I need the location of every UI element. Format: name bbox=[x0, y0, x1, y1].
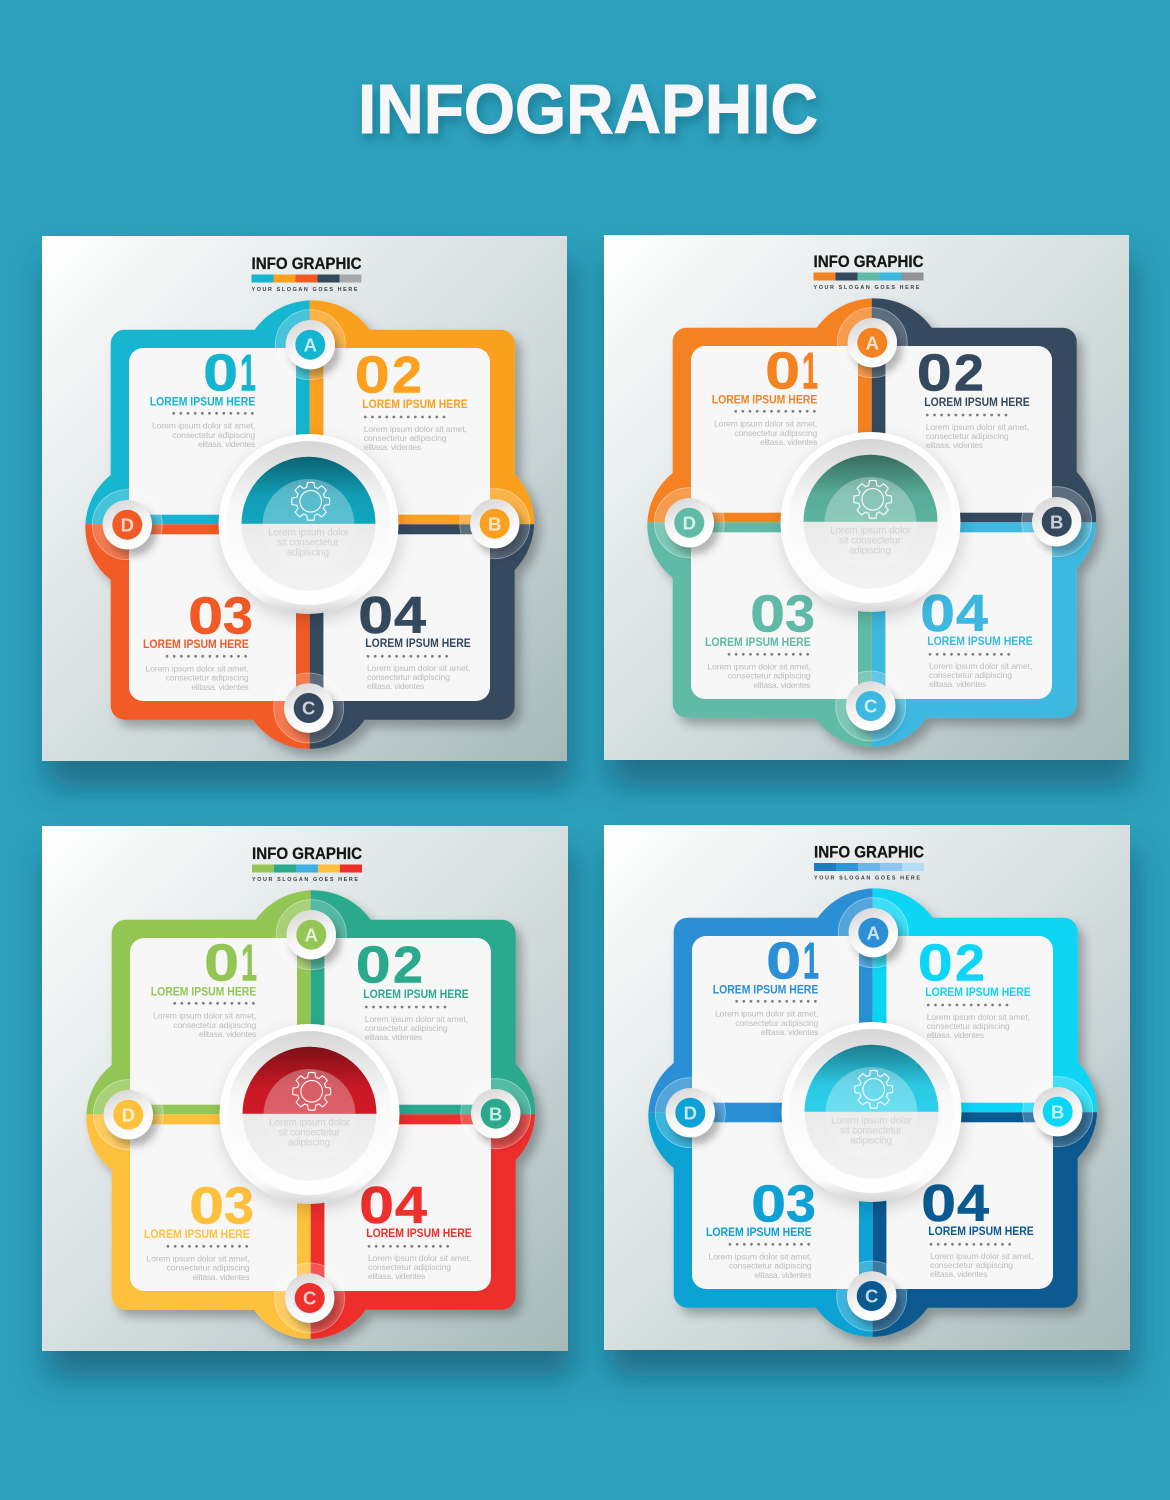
section 02 bbox=[918, 935, 1031, 1040]
section 02: Lorem ipsum dolor sit amet, bbox=[926, 422, 1029, 432]
section 03: Lorem ipsum dolor sit amet, bbox=[146, 1253, 250, 1263]
section 01: elitasa. videntes bbox=[198, 439, 255, 449]
quadrant frame bbox=[85, 300, 534, 749]
section 03: 0 bbox=[751, 1176, 786, 1234]
node D: D bbox=[122, 1104, 135, 1125]
node C bbox=[836, 671, 906, 741]
section 01: consectetur adipiscing bbox=[172, 430, 256, 440]
panel: teal, amber, orange, navy infographic bbox=[42, 236, 567, 761]
node B: B bbox=[488, 513, 501, 534]
section 02: LOREM IPSUM HERE bbox=[924, 396, 1030, 409]
center dial: Lorem ipsum dolor bbox=[268, 527, 350, 538]
section 02: 0 bbox=[917, 345, 952, 403]
header logo bbox=[814, 252, 924, 291]
quadrant frame bbox=[86, 890, 535, 1339]
section 04: consectetur adipiscing bbox=[929, 670, 1012, 680]
section 01 bbox=[713, 932, 819, 1037]
section 02 bbox=[355, 347, 468, 452]
center dial: Lorem ipsum dolor bbox=[831, 1115, 913, 1126]
section 04 bbox=[921, 1175, 1034, 1279]
section 02: Lorem ipsum dolor sit amet, bbox=[364, 424, 467, 434]
section 01: Lorem ipsum dolor sit amet, bbox=[714, 419, 817, 429]
panel: orange, navy, mint, sky infographic bbox=[604, 235, 1129, 760]
header logo: YOUR SLOGAN GOES HERE bbox=[814, 285, 920, 291]
section 03: 3 bbox=[786, 1176, 816, 1234]
section 04: Lorem ipsum dolor sit amet, bbox=[929, 661, 1032, 671]
section 04: elitasa. videntes bbox=[929, 679, 986, 689]
header logo: YOUR SLOGAN GOES HERE bbox=[252, 877, 358, 883]
center dial: Lorem ipsum dolor bbox=[830, 525, 912, 536]
section 01: 0 bbox=[204, 934, 239, 992]
section 03: consectetur adipiscing bbox=[166, 673, 249, 683]
section 04: 0 bbox=[359, 1177, 394, 1235]
node B: B bbox=[1051, 1101, 1064, 1122]
header logo: INFO GRAPHIC bbox=[252, 844, 362, 863]
node C: C bbox=[303, 1288, 316, 1309]
panel: green, teal, yellow, red infographic bbox=[42, 826, 568, 1351]
section 01: 0 bbox=[766, 932, 801, 990]
header logo: YOUR SLOGAN GOES HERE bbox=[252, 287, 358, 293]
node C: C bbox=[302, 698, 315, 719]
section 02 bbox=[917, 345, 1030, 450]
section 01: Lorem ipsum dolor sit amet, bbox=[153, 1011, 256, 1021]
center dial: adipiscing bbox=[287, 547, 329, 558]
section 04 bbox=[358, 587, 471, 691]
section 04: elitasa. videntes bbox=[930, 1269, 987, 1279]
node D bbox=[93, 1080, 163, 1150]
section 01: elitasa. videntes bbox=[761, 1027, 818, 1037]
section 01: 0 bbox=[765, 342, 800, 400]
center dial: sit consectetur bbox=[840, 1125, 903, 1136]
section 02: LOREM IPSUM HERE bbox=[363, 988, 469, 1001]
header logo bbox=[814, 842, 924, 882]
connector bars bbox=[125, 340, 495, 705]
section 01 bbox=[150, 344, 256, 449]
section 03: Lorem ipsum dolor sit amet, bbox=[145, 663, 249, 673]
section 04: Lorem ipsum dolor sit amet, bbox=[930, 1251, 1033, 1261]
section 02: elitasa. videntes bbox=[927, 1030, 984, 1040]
icon: gear bbox=[854, 480, 892, 518]
section 02: consectetur adipiscing bbox=[926, 431, 1009, 441]
section 03: LOREM IPSUM HERE bbox=[705, 636, 811, 649]
white card bbox=[692, 936, 1053, 1289]
section 03: LOREM IPSUM HERE bbox=[144, 1228, 250, 1241]
center dial bbox=[218, 434, 398, 614]
section 04 bbox=[920, 585, 1033, 689]
quadrant frame bbox=[647, 298, 1096, 747]
panel: blue tones infographic bbox=[604, 825, 1130, 1350]
node A bbox=[837, 308, 907, 378]
section 03 bbox=[706, 1176, 816, 1280]
node B: B bbox=[1050, 511, 1063, 532]
center dial: sit consectetur bbox=[277, 537, 340, 548]
section 03: LOREM IPSUM HERE bbox=[706, 1226, 812, 1239]
section 04: elitasa. videntes bbox=[368, 1271, 425, 1281]
node D: D bbox=[683, 512, 696, 533]
section 01: consectetur adipiscing bbox=[735, 1018, 819, 1028]
connector bars bbox=[687, 338, 1057, 703]
section 03: elitasa. videntes bbox=[754, 1270, 812, 1280]
icon: gear bbox=[855, 1070, 893, 1108]
section 02: Lorem ipsum dolor sit amet, bbox=[365, 1014, 468, 1024]
center dial bbox=[220, 1024, 400, 1204]
section 03: 3 bbox=[224, 1178, 254, 1236]
section 04: 4 bbox=[957, 1175, 989, 1233]
header logo: INFO GRAPHIC bbox=[814, 842, 924, 862]
center dial: sit consectetur bbox=[839, 535, 902, 546]
white card bbox=[691, 346, 1052, 699]
node B bbox=[461, 1079, 531, 1149]
section 02: consectetur adipiscing bbox=[927, 1021, 1010, 1031]
node A bbox=[276, 900, 346, 970]
section 01: 1 bbox=[803, 932, 819, 990]
section 02: 2 bbox=[954, 345, 984, 403]
section 03: Lorem ipsum dolor sit amet, bbox=[707, 661, 811, 671]
node D: D bbox=[121, 514, 134, 535]
section 03: consectetur adipiscing bbox=[167, 1263, 250, 1273]
node D bbox=[655, 1078, 725, 1148]
section 03: elitasa. videntes bbox=[192, 1272, 250, 1282]
section 01: elitasa. videntes bbox=[760, 437, 817, 447]
section 04: consectetur adipiscing bbox=[930, 1260, 1013, 1270]
header logo: INFO GRAPHIC bbox=[252, 254, 362, 273]
node C: C bbox=[865, 1286, 878, 1307]
section 02: consectetur adipiscing bbox=[365, 1023, 448, 1033]
section 02: elitasa. videntes bbox=[365, 1032, 422, 1042]
center dial: adipiscing bbox=[288, 1137, 330, 1148]
panel background bbox=[604, 235, 1129, 760]
section 02: LOREM IPSUM HERE bbox=[362, 398, 468, 411]
connector bars bbox=[126, 930, 496, 1295]
node C bbox=[275, 1263, 345, 1333]
section 03: elitasa. videntes bbox=[191, 682, 249, 692]
quadrant frame bbox=[648, 888, 1097, 1337]
section 01: 0 bbox=[203, 344, 238, 402]
section 04: Lorem ipsum dolor sit amet, bbox=[367, 663, 470, 673]
section 04: 4 bbox=[395, 1177, 427, 1235]
section 03: consectetur adipiscing bbox=[728, 671, 811, 681]
section 03: 3 bbox=[785, 586, 815, 644]
section 04: consectetur adipiscing bbox=[367, 672, 450, 682]
node A bbox=[275, 310, 345, 380]
section 02: 0 bbox=[356, 937, 391, 995]
section 02: 2 bbox=[955, 935, 985, 993]
center dial: Lorem ipsum dolor bbox=[269, 1117, 351, 1128]
section 04: 0 bbox=[358, 587, 393, 645]
section 04: elitasa. videntes bbox=[367, 681, 424, 691]
section 02: LOREM IPSUM HERE bbox=[925, 986, 1031, 999]
section 01: elitasa. videntes bbox=[199, 1029, 256, 1039]
section 04: LOREM IPSUM HERE bbox=[366, 1227, 472, 1240]
node B bbox=[460, 489, 530, 559]
section 04: 0 bbox=[920, 585, 955, 643]
section 04: 4 bbox=[394, 587, 426, 645]
section 01: Lorem ipsum dolor sit amet, bbox=[152, 421, 255, 431]
section 01: LOREM IPSUM HERE bbox=[713, 983, 819, 996]
white card bbox=[130, 938, 491, 1291]
section 04: 0 bbox=[921, 1175, 956, 1233]
section 03: 0 bbox=[188, 588, 223, 646]
section 04: 4 bbox=[956, 585, 988, 643]
node D bbox=[654, 488, 724, 558]
node D bbox=[92, 490, 162, 560]
section 02: 2 bbox=[393, 937, 423, 995]
section 03: LOREM IPSUM HERE bbox=[143, 638, 249, 651]
node D: D bbox=[684, 1102, 697, 1123]
node C bbox=[274, 673, 344, 743]
section 01 bbox=[151, 934, 257, 1039]
section 04: LOREM IPSUM HERE bbox=[365, 637, 471, 650]
node B: B bbox=[489, 1103, 502, 1124]
node A: A bbox=[867, 922, 880, 943]
section 01: LOREM IPSUM HERE bbox=[150, 395, 256, 408]
center dial bbox=[782, 1022, 962, 1202]
section 01: Lorem ipsum dolor sit amet, bbox=[715, 1009, 818, 1019]
node C bbox=[837, 1261, 907, 1331]
title: INFOGRAPHIC bbox=[358, 70, 818, 148]
center dial: sit consectetur bbox=[278, 1127, 341, 1138]
section 02: 2 bbox=[392, 347, 422, 405]
section 04: Lorem ipsum dolor sit amet, bbox=[368, 1253, 471, 1263]
section 03 bbox=[705, 586, 815, 690]
section 02: elitasa. videntes bbox=[926, 440, 983, 450]
section 02 bbox=[356, 937, 469, 1042]
icon: gear bbox=[293, 1072, 331, 1110]
section 02: 0 bbox=[355, 347, 390, 405]
section 03: elitasa. videntes bbox=[753, 680, 811, 690]
section 03 bbox=[144, 1178, 254, 1282]
white card bbox=[129, 348, 490, 701]
section 02: 0 bbox=[918, 935, 953, 993]
section 02: elitasa. videntes bbox=[364, 442, 421, 452]
section 01 bbox=[712, 342, 818, 447]
node B bbox=[1022, 487, 1092, 557]
section 03: 3 bbox=[223, 588, 253, 646]
center dial: adipiscing bbox=[849, 545, 891, 556]
section 01: consectetur adipiscing bbox=[173, 1020, 257, 1030]
section 01: 1 bbox=[240, 344, 256, 402]
panel background bbox=[604, 825, 1130, 1350]
section 03: 0 bbox=[750, 586, 785, 644]
header logo: YOUR SLOGAN GOES HERE bbox=[814, 876, 920, 882]
node A: A bbox=[866, 332, 879, 353]
section 04: LOREM IPSUM HERE bbox=[928, 1225, 1034, 1238]
panel background bbox=[42, 236, 567, 761]
panel background bbox=[42, 826, 568, 1351]
node A: A bbox=[305, 924, 318, 945]
section 01: 1 bbox=[241, 934, 257, 992]
connector bars bbox=[688, 928, 1058, 1293]
header logo bbox=[252, 254, 362, 293]
section 03 bbox=[143, 588, 253, 692]
center dial bbox=[780, 432, 960, 612]
section 03: Lorem ipsum dolor sit amet, bbox=[708, 1251, 812, 1261]
section 04: consectetur adipiscing bbox=[368, 1262, 451, 1272]
section 01: LOREM IPSUM HERE bbox=[712, 393, 818, 406]
node C: C bbox=[864, 696, 877, 717]
section 01: consectetur adipiscing bbox=[734, 428, 818, 438]
center dial: adipiscing bbox=[850, 1135, 892, 1146]
section 03: 0 bbox=[189, 1178, 224, 1236]
section 02: Lorem ipsum dolor sit amet, bbox=[927, 1012, 1030, 1022]
node A: A bbox=[304, 334, 317, 355]
section 03: consectetur adipiscing bbox=[729, 1261, 812, 1271]
header logo: INFO GRAPHIC bbox=[814, 252, 924, 271]
section 04: LOREM IPSUM HERE bbox=[927, 635, 1033, 648]
node A bbox=[838, 898, 908, 968]
node B bbox=[1023, 1077, 1093, 1147]
section 04 bbox=[359, 1177, 472, 1281]
section 01: 1 bbox=[802, 342, 818, 400]
section 01: LOREM IPSUM HERE bbox=[151, 985, 257, 998]
header logo bbox=[252, 844, 362, 883]
icon: gear bbox=[292, 482, 330, 520]
section 02: consectetur adipiscing bbox=[364, 433, 447, 443]
